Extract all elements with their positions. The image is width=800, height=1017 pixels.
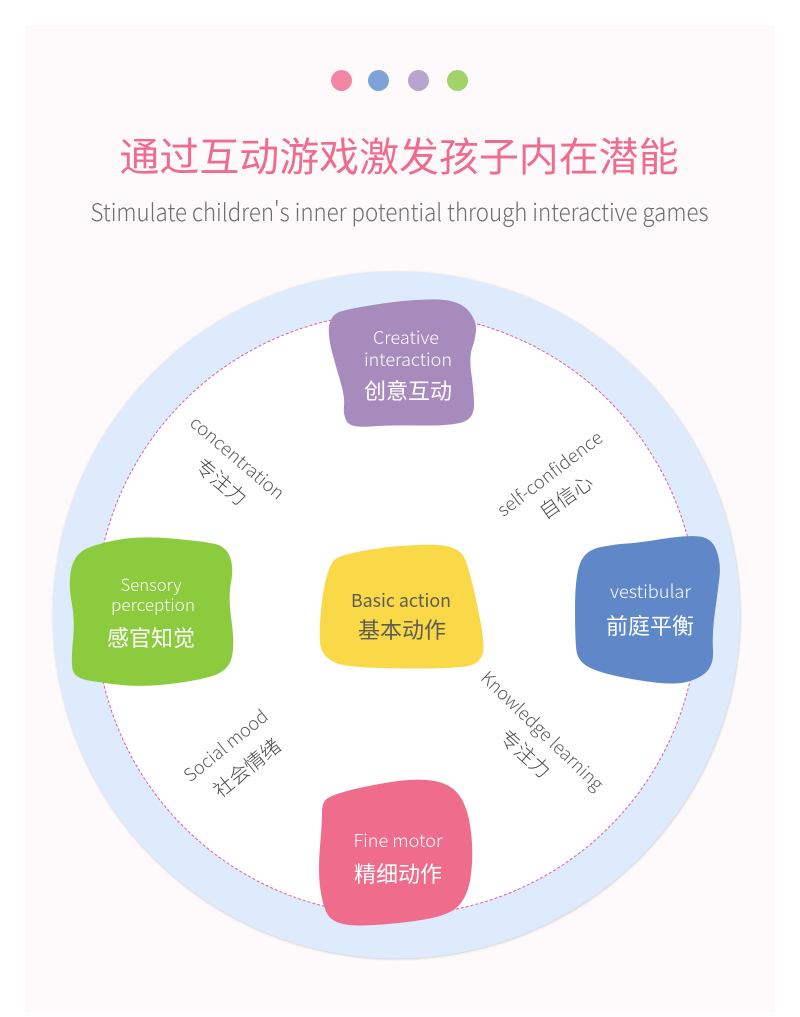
decorative dots <box>331 70 468 91</box>
panel: basic action <box>320 545 484 669</box>
subtitle: Stimulate children's inner potential through interactive games <box>90 193 708 228</box>
panel: sensory perception: Sensory <box>120 571 182 596</box>
label: social mood: Social mood <box>178 703 273 787</box>
panel: sensory perception: perception <box>111 591 195 616</box>
panel: vestibular: 前庭平衡 <box>606 609 694 641</box>
panel: basic action: Basic action <box>351 587 451 613</box>
label: knowledge learning: 专注力 <box>494 722 558 784</box>
panel: vestibular <box>575 536 720 684</box>
panel: sensory perception: 感官知觉 <box>107 621 195 653</box>
panel: creative interaction: Creative <box>373 324 439 350</box>
panel: fine motor: Fine motor <box>354 827 443 853</box>
panel: creative interaction: 创意互动 <box>364 374 452 406</box>
label: self-confidence: self-confidence <box>491 424 608 522</box>
panel: fine motor: 精细动作 <box>354 857 442 889</box>
title: 通过互动游戏激发孩子内在潜能 <box>120 125 678 183</box>
label: self-confidence: 自信心 <box>532 467 598 525</box>
inner dashed circle <box>96 313 698 915</box>
panel: basic action: 基本动作 <box>358 613 446 645</box>
panel: sensory perception <box>70 537 233 686</box>
label: knowledge learning: Knowledge learning <box>475 665 610 796</box>
label: social mood: 社会情绪 <box>206 730 286 803</box>
outer circle <box>53 272 740 959</box>
panel: creative interaction: interaction <box>364 346 452 372</box>
panel: creative interaction <box>329 299 476 427</box>
label: concentration: 专注力 <box>190 450 254 511</box>
label: concentration: concentration <box>185 409 291 505</box>
panel: vestibular: vestibular <box>610 578 692 604</box>
panel: fine motor <box>319 780 472 925</box>
